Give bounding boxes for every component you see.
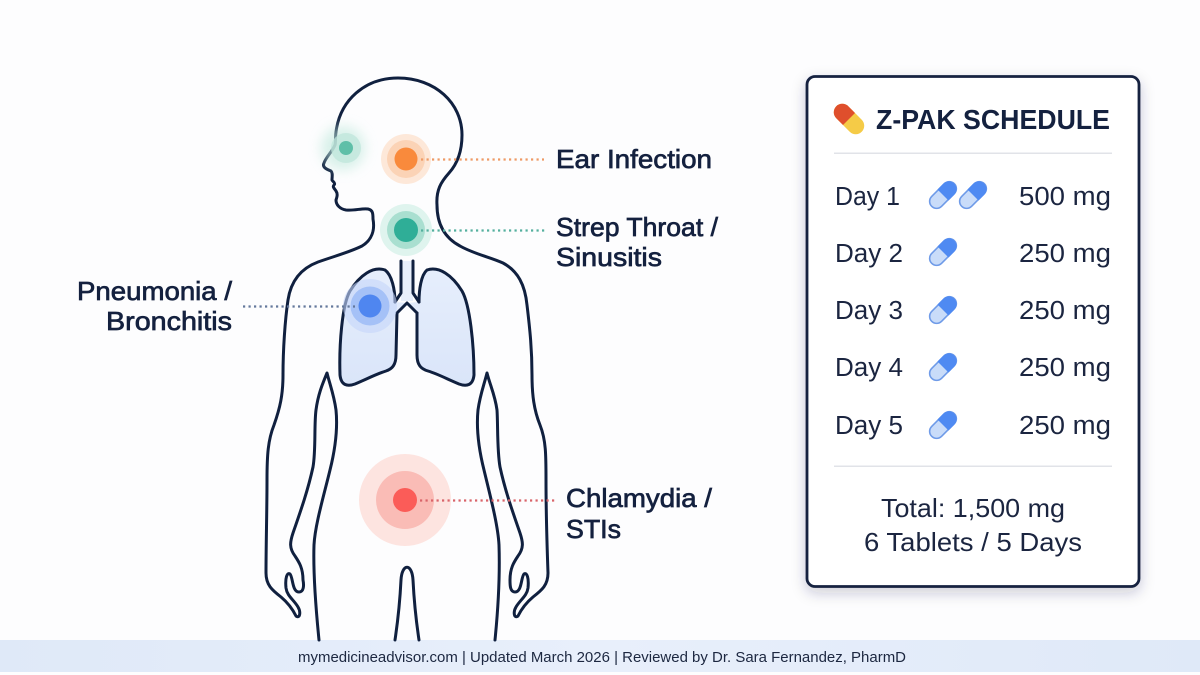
row: day 5: Day 5 xyxy=(835,412,903,440)
label: chlamydia stis: STIs xyxy=(566,514,621,544)
lungs xyxy=(340,261,474,385)
row: day 3 xyxy=(835,293,1111,327)
row: day 3: 250 mg xyxy=(1019,297,1111,325)
lung connector xyxy=(243,305,355,308)
label: ear infection: Ear Infection xyxy=(556,144,712,174)
body diagram xyxy=(266,78,548,640)
label: chlamydia stis xyxy=(566,483,713,544)
ear marker xyxy=(381,134,544,184)
trachea xyxy=(395,261,419,313)
row: day 4: Day 4 xyxy=(835,354,903,382)
total summary xyxy=(864,493,1082,557)
abdomen connector xyxy=(420,499,555,502)
crotch outline xyxy=(395,567,419,640)
label: strep throat sinusitis: Strep Throat / xyxy=(556,212,719,242)
row: day 1: 500 mg xyxy=(1019,183,1111,211)
label: strep throat sinusitis: Sinusitis xyxy=(556,242,662,272)
label: pneumonia bronchitis: Pneumonia / xyxy=(77,276,233,306)
icon: red and yellow capsule xyxy=(830,100,868,138)
sinus marker xyxy=(321,126,365,170)
panel heading: Z-PAK SCHEDULE xyxy=(876,104,1110,135)
row: day 1 xyxy=(835,178,1111,212)
throat connector xyxy=(421,229,545,232)
throat marker xyxy=(380,204,545,256)
row: day 3: Day 3 xyxy=(835,297,903,325)
row: day 2: 250 mg xyxy=(1019,240,1111,268)
footer band xyxy=(0,640,1200,672)
row: day 2: Day 2 xyxy=(835,240,903,268)
row: day 1: Day 1 xyxy=(835,183,900,211)
label: pneumonia bronchitis: Bronchitis xyxy=(106,306,232,336)
row: day 5 xyxy=(835,408,1111,442)
label: chlamydia stis: Chlamydia / xyxy=(566,483,713,513)
total summary: 6 Tablets / 5 Days xyxy=(864,527,1082,557)
label: strep throat sinusitis xyxy=(556,212,719,272)
abdomen marker xyxy=(359,454,555,546)
row: day 5: 250 mg xyxy=(1019,412,1111,440)
ear connector xyxy=(421,158,544,161)
body outline xyxy=(336,78,548,640)
panel: z-pak schedule xyxy=(807,76,1139,586)
footer text: mymedicineadvisor.com | Updated March 2026 | Reviewed by Dr. Sara Fernandez, PharmD xyxy=(298,650,906,666)
lung marker xyxy=(243,279,397,333)
row: day 4: 250 mg xyxy=(1019,354,1111,382)
total summary: Total: 1,500 mg xyxy=(881,493,1065,523)
row: day 4 xyxy=(835,350,1111,384)
row: day 2 xyxy=(835,235,1111,269)
label: pneumonia bronchitis xyxy=(77,276,233,336)
